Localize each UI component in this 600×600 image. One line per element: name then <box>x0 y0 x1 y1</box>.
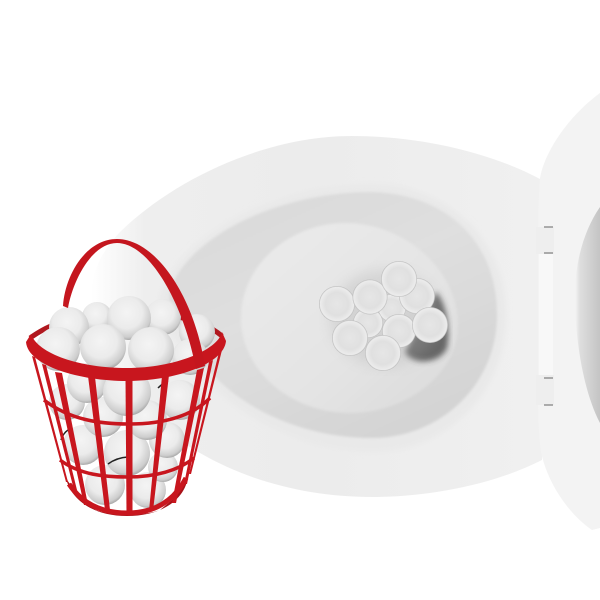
basket front rim <box>26 332 226 381</box>
lid opening <box>575 207 600 423</box>
basket balls <box>36 296 215 508</box>
basket hoops <box>44 398 210 513</box>
lid body <box>538 93 600 530</box>
basket back rim <box>30 317 222 338</box>
water surface <box>241 223 458 413</box>
basket side bars <box>32 350 222 514</box>
bowl outer rim <box>91 136 542 497</box>
basket floor <box>66 476 188 516</box>
toilet seat lid <box>536 93 600 530</box>
bowl inner basin <box>169 192 497 438</box>
golf balls in bowl <box>319 261 448 371</box>
dark gaps between balls <box>61 381 168 464</box>
red basket of golf balls <box>26 239 226 516</box>
basket handle <box>63 239 205 369</box>
drain shadow <box>405 292 448 361</box>
bowl inner shoulder <box>159 184 506 452</box>
toilet bowl <box>91 136 542 497</box>
hinge <box>536 227 554 405</box>
